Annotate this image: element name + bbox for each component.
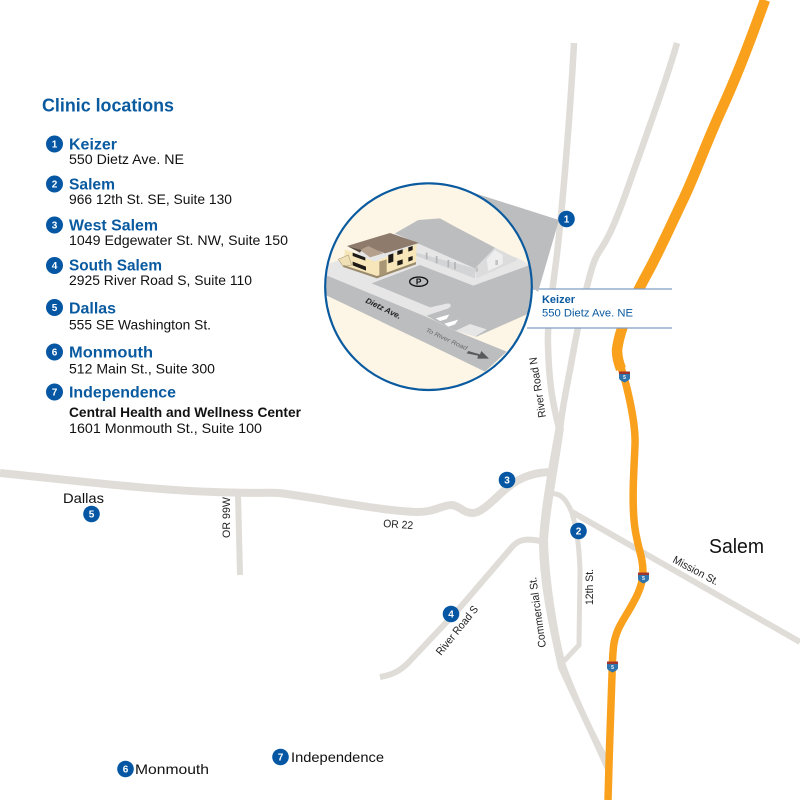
callout text: Keizer: Keizer <box>542 294 576 306</box>
entry: Salem: Salem <box>69 176 115 194</box>
road: Commercial St. <box>539 425 610 772</box>
map city labels <box>63 490 764 777</box>
marker 5 <box>83 506 100 522</box>
building: tan medical office <box>338 233 419 278</box>
city: Independence: Independence <box>291 749 384 765</box>
zoom wedge from map marker to inset <box>474 193 559 292</box>
road label: Dietz Ave.: Dietz Ave. <box>364 296 403 321</box>
driveway arrows <box>436 314 458 327</box>
curb <box>456 324 487 337</box>
entry: Keizer: 550 Dietz Ave. NE <box>69 151 184 167</box>
office entry <box>379 259 387 276</box>
label: Commercial St.: Commercial St. <box>527 576 549 648</box>
entry: Keizer: Keizer <box>69 136 117 154</box>
office side stairs <box>338 255 352 267</box>
entry: West Salem <box>46 216 288 248</box>
marker 2 <box>570 523 587 539</box>
marker 2: 2 <box>576 526 582 538</box>
entry: South Salem: 4 <box>52 261 58 272</box>
entry: South Salem: South Salem <box>69 258 162 274</box>
marker 6 <box>117 761 134 777</box>
callout text: address: 550 Dietz Ave. NE <box>542 308 633 320</box>
label: OR 99W: OR 99W <box>221 496 233 538</box>
entry: Monmouth: Monmouth <box>69 344 153 362</box>
entry: Keizer: 1 <box>52 140 58 150</box>
entry: Dallas: Dallas <box>69 300 116 318</box>
Dietz Ave. road <box>323 274 507 372</box>
shield: I-5 south <box>607 662 618 672</box>
shield: I-5 central: 5 <box>642 576 645 582</box>
entry: Salem <box>46 176 232 207</box>
shield: I-5 north <box>619 372 630 382</box>
interstate shields <box>607 372 649 672</box>
label: OR 22: OR 22 <box>383 518 414 532</box>
marker 7 <box>272 749 289 765</box>
entry: Keizer <box>46 136 184 167</box>
highway: I-5 <box>608 0 765 800</box>
building: large gray clinic <box>395 218 517 278</box>
direction arrow <box>467 351 489 359</box>
office roof <box>347 233 419 253</box>
inset ring <box>325 183 532 390</box>
marker 1: 1 <box>564 214 570 226</box>
I-5 south segment <box>608 365 643 800</box>
inset ground <box>325 183 532 390</box>
marker 7: 7 <box>278 752 284 764</box>
city: Dallas: Dallas <box>63 490 104 506</box>
entry: South Salem: 2925 River Road S, Suite 110 <box>69 272 252 288</box>
entry: Monmouth: 512 Main St., Suite 300 <box>69 360 215 376</box>
city: Monmouth: Monmouth <box>135 761 209 777</box>
shield: I-5 central <box>638 572 649 584</box>
label: River Road N: River Road N <box>528 356 549 418</box>
marker 6: 6 <box>123 764 129 776</box>
entry: Independence: 7 <box>52 388 58 398</box>
office base <box>343 262 416 278</box>
entry: Independence: Central Health and Wellness Center <box>69 404 302 420</box>
entry: Monmouth <box>46 344 215 376</box>
road: OR 99W <box>238 494 240 575</box>
entry: West Salem: 3 <box>52 220 58 232</box>
sidewalks and site ground <box>325 233 533 318</box>
city: Salem: Salem <box>709 536 764 558</box>
road: northeast connector <box>560 43 677 430</box>
parking symbol <box>410 277 428 287</box>
callout connector: Keizer address <box>527 289 672 328</box>
label: River Road S: River Road S <box>434 604 481 658</box>
entry: Dallas: 555 SE Washington St. <box>69 316 211 332</box>
marker 1 <box>558 211 575 227</box>
road: Mission St. <box>572 512 800 642</box>
label: 12th St.: 12th St. <box>584 569 596 605</box>
entry: Dallas <box>46 299 211 332</box>
entry: Independence <box>46 384 302 436</box>
heading: Clinic locations <box>42 96 174 116</box>
entry: Independence: 1601 Monmouth St., Suite 100 <box>69 420 262 436</box>
entry: Monmouth: 6 <box>52 348 58 358</box>
road: OR 22 <box>0 472 552 513</box>
label: Mission St.: Mission St. <box>671 554 720 588</box>
map road labels <box>221 356 720 658</box>
shield: I-5 south: 5 <box>611 665 614 671</box>
I-5 north segment <box>617 0 765 369</box>
marker 3: 3 <box>504 476 510 486</box>
marker 3 <box>499 472 515 488</box>
road label: To River Road: To River Road <box>424 328 469 352</box>
marker 4: 4 <box>448 610 454 620</box>
entry: West Salem: West Salem <box>69 218 158 234</box>
marker 5: 5 <box>89 510 95 520</box>
entry: South Salem <box>46 257 252 288</box>
marker 4 <box>443 606 459 622</box>
office windows <box>353 246 413 271</box>
panel: clinic locations list <box>42 96 302 436</box>
road: River Road N <box>548 43 574 432</box>
shield: I-5 north: 5 <box>623 375 626 381</box>
map markers <box>83 211 587 777</box>
parking symbol: P <box>416 277 422 287</box>
entry: Dallas: 5 <box>52 303 58 314</box>
road: River Road S <box>380 540 540 677</box>
entry: Salem: 2 <box>52 180 58 190</box>
inset site map <box>323 183 537 390</box>
office walls <box>343 244 417 276</box>
parking lot <box>372 265 537 337</box>
road: 12th St. <box>551 494 580 661</box>
entry: West Salem: 1049 Edgewater St. NW, Suite 150 <box>69 232 288 248</box>
entry: Independence: Independence <box>69 384 176 402</box>
entry: Salem: 966 12th St. SE, Suite 130 <box>69 191 232 207</box>
